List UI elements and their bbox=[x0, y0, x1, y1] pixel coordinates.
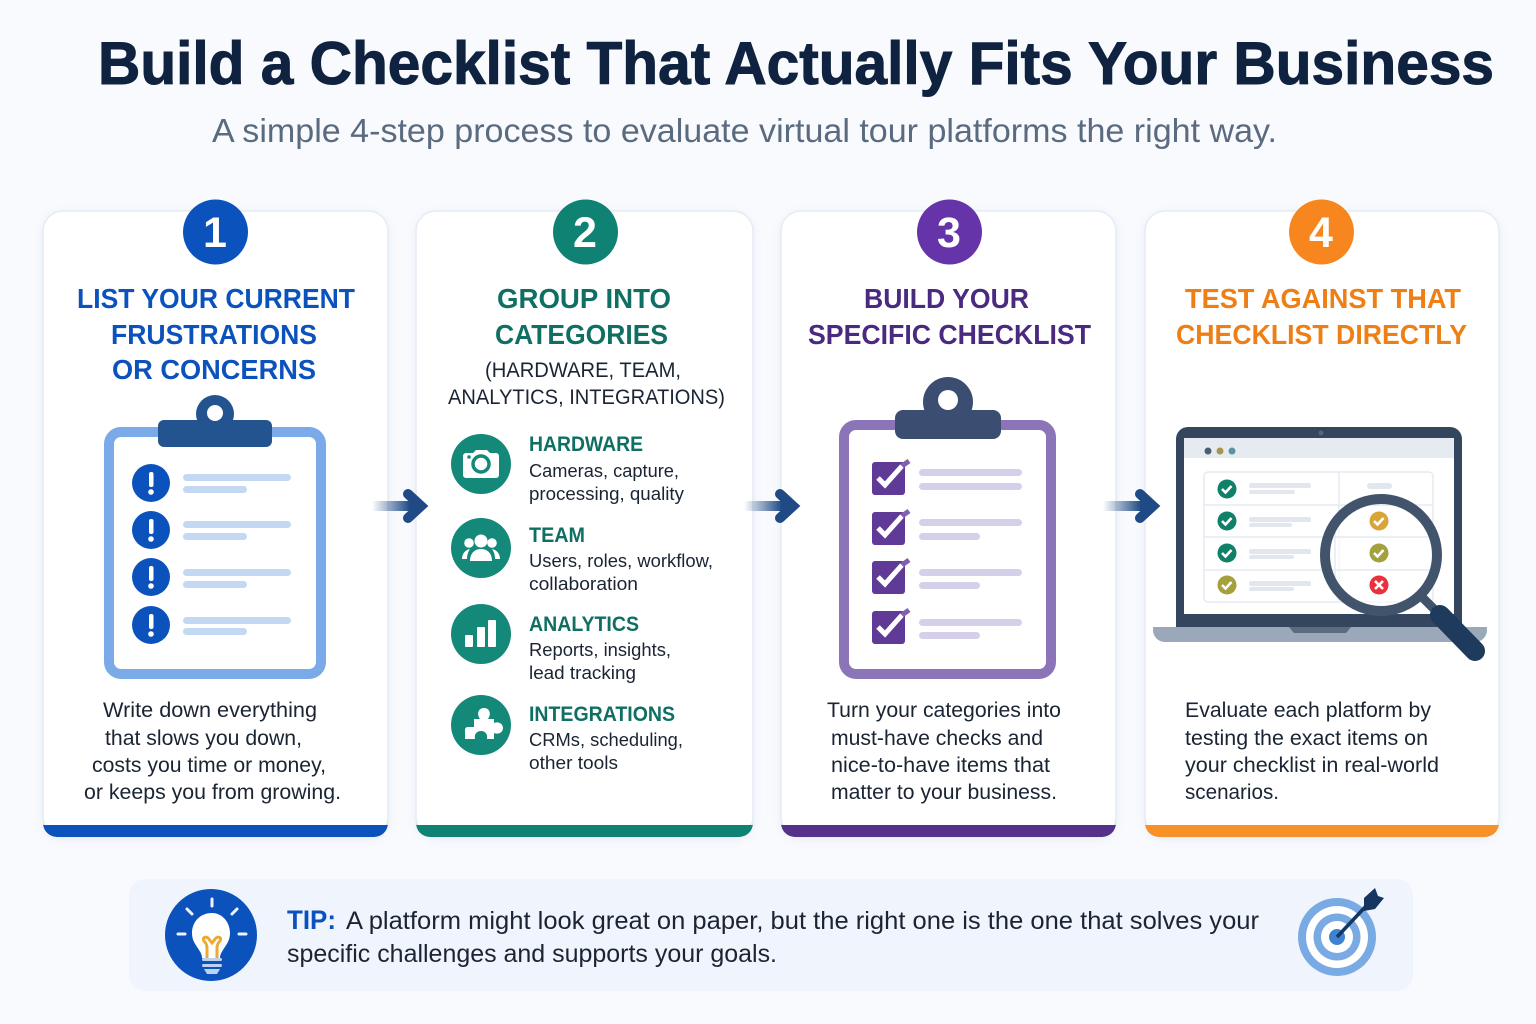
tip text: TIP: bbox=[287, 905, 336, 935]
category: team: TEAM bbox=[529, 524, 585, 547]
tip background bbox=[129, 879, 1413, 991]
heading bbox=[495, 283, 671, 350]
arrow: step 3 to 4 bbox=[1103, 494, 1153, 518]
body text bbox=[827, 699, 1061, 804]
body text: must-have checks and bbox=[831, 727, 1043, 750]
accent bar bbox=[43, 823, 388, 837]
step number: 3 bbox=[937, 209, 961, 257]
tip text: A platform might look great on paper, but the right one is the one that solves your bbox=[346, 907, 1259, 935]
heading bbox=[77, 283, 355, 385]
heading: CATEGORIES bbox=[495, 319, 668, 350]
sub-heading: (HARDWARE, TEAM, bbox=[485, 359, 681, 382]
tip text: specific challenges and supports your goals. bbox=[287, 940, 777, 968]
body text: Write down everything bbox=[103, 699, 317, 722]
panel: step 4 bbox=[1145, 200, 1499, 837]
heading: TEST AGAINST THAT bbox=[1185, 283, 1461, 314]
step number bbox=[1289, 200, 1354, 264]
heading bbox=[1176, 283, 1467, 350]
category: integrations: INTEGRATIONS bbox=[529, 703, 675, 726]
body text bbox=[1185, 699, 1439, 804]
accent bar bbox=[416, 823, 753, 837]
body text: costs you time or money, bbox=[92, 754, 326, 777]
icon: clipboard with alerts bbox=[109, 395, 321, 674]
heading bbox=[808, 283, 1091, 350]
category: integrations: other tools bbox=[529, 752, 618, 773]
card background bbox=[43, 211, 388, 837]
category: analytics: ANALYTICS bbox=[529, 613, 639, 636]
body text: testing the exact items on bbox=[1185, 727, 1428, 750]
panel: step 3 bbox=[781, 200, 1116, 837]
card background bbox=[1145, 211, 1499, 837]
body text bbox=[84, 699, 341, 804]
sub-heading bbox=[448, 359, 725, 409]
body text: your checklist in real-world bbox=[1185, 754, 1439, 777]
heading: BUILD YOUR bbox=[864, 283, 1029, 314]
step number: 2 bbox=[573, 209, 597, 257]
arrow: step 2 to 3 bbox=[744, 494, 793, 518]
category: hardware bbox=[451, 433, 685, 504]
body text: matter to your business. bbox=[831, 781, 1057, 804]
accent bar bbox=[781, 823, 1116, 837]
heading: LIST YOUR CURRENT bbox=[77, 283, 355, 314]
category: analytics bbox=[451, 604, 671, 683]
body text: nice-to-have items that bbox=[831, 754, 1050, 777]
card background bbox=[781, 211, 1116, 837]
category: integrations: CRMs, scheduling, bbox=[529, 729, 683, 750]
sub-heading: ANALYTICS, INTEGRATIONS) bbox=[448, 386, 725, 409]
heading: FRUSTRATIONS bbox=[111, 319, 317, 350]
category: analytics: Reports, insights, bbox=[529, 639, 671, 660]
step number bbox=[917, 200, 982, 264]
arrow: step 1 to 2 bbox=[372, 494, 421, 518]
heading: OR CONCERNS bbox=[112, 354, 316, 385]
step number bbox=[553, 200, 618, 264]
tip text bbox=[287, 905, 1259, 968]
category: hardware: processing, quality bbox=[529, 483, 685, 504]
category: hardware: Cameras, capture, bbox=[529, 460, 679, 481]
icon: light bulb bbox=[165, 889, 257, 981]
icon: laptop with magnifier bbox=[1153, 427, 1487, 651]
heading: GROUP INTO bbox=[497, 283, 671, 314]
heading: SPECIFIC CHECKLIST bbox=[808, 319, 1091, 350]
subtitle: A simple 4-step process to evaluate virtual tour platforms the right way. bbox=[212, 112, 1277, 149]
category: team: collaboration bbox=[529, 573, 638, 594]
panel: step 2 bbox=[416, 200, 753, 837]
step number: 4 bbox=[1309, 209, 1333, 257]
title: Build a Checklist That Actually Fits Your Business bbox=[98, 30, 1494, 97]
body text: Evaluate each platform by bbox=[1185, 699, 1431, 722]
panel: tip bbox=[129, 879, 1413, 991]
accent bar bbox=[1145, 823, 1499, 837]
body text: that slows you down, bbox=[105, 727, 302, 750]
icon: target with arrow bbox=[1298, 888, 1384, 976]
icon: clipboard with checks bbox=[844, 377, 1051, 674]
step number: 1 bbox=[203, 209, 227, 257]
heading: CHECKLIST DIRECTLY bbox=[1176, 319, 1467, 350]
body text: Turn your categories into bbox=[827, 699, 1061, 722]
body text: scenarios. bbox=[1185, 781, 1279, 804]
category: team: Users, roles, workflow, bbox=[529, 550, 713, 571]
category: hardware: HARDWARE bbox=[529, 433, 643, 456]
category: analytics: lead tracking bbox=[529, 662, 636, 683]
category: team bbox=[451, 518, 713, 594]
card background bbox=[416, 211, 753, 837]
panel: step 1 bbox=[43, 200, 388, 837]
category: integrations bbox=[451, 695, 683, 773]
body text: or keeps you from growing. bbox=[84, 781, 341, 804]
step number bbox=[183, 200, 248, 264]
